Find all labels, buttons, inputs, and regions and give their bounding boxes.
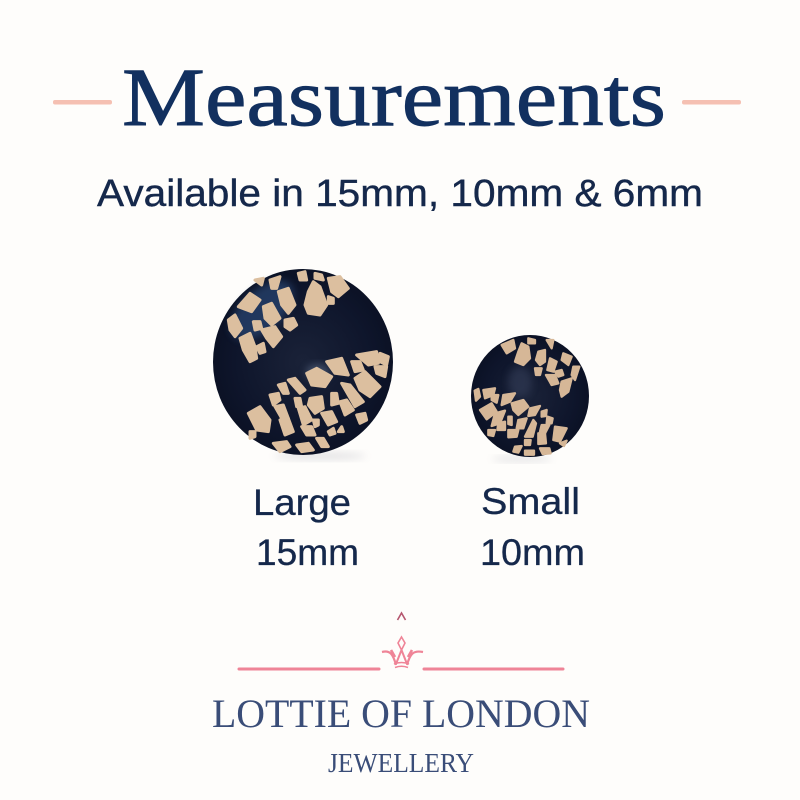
label: Large 15mm: 15mm <box>256 532 359 573</box>
subtitle: available sizes: Available in 15mm, 10mm & 6mm <box>97 173 703 215</box>
heading: Measurements with side dashes: Measurements <box>122 51 666 143</box>
logo: crown and rule lines <box>239 637 563 669</box>
earring: small 10mm stud <box>471 335 589 462</box>
logo: caret mark <box>398 613 406 620</box>
label: Small 10mm <box>480 481 585 573</box>
label: Large 15mm <box>253 482 359 573</box>
label: Small 10mm: Small <box>481 481 580 522</box>
label: Small 10mm: 10mm <box>480 532 585 573</box>
earring: large 15mm stud <box>213 269 393 460</box>
logo text: Jewellery: JEWELLERY <box>328 748 474 778</box>
logo text: Lottie of London: LOTTIE OF LONDON <box>212 691 590 736</box>
label: Large 15mm: Large <box>253 482 351 523</box>
